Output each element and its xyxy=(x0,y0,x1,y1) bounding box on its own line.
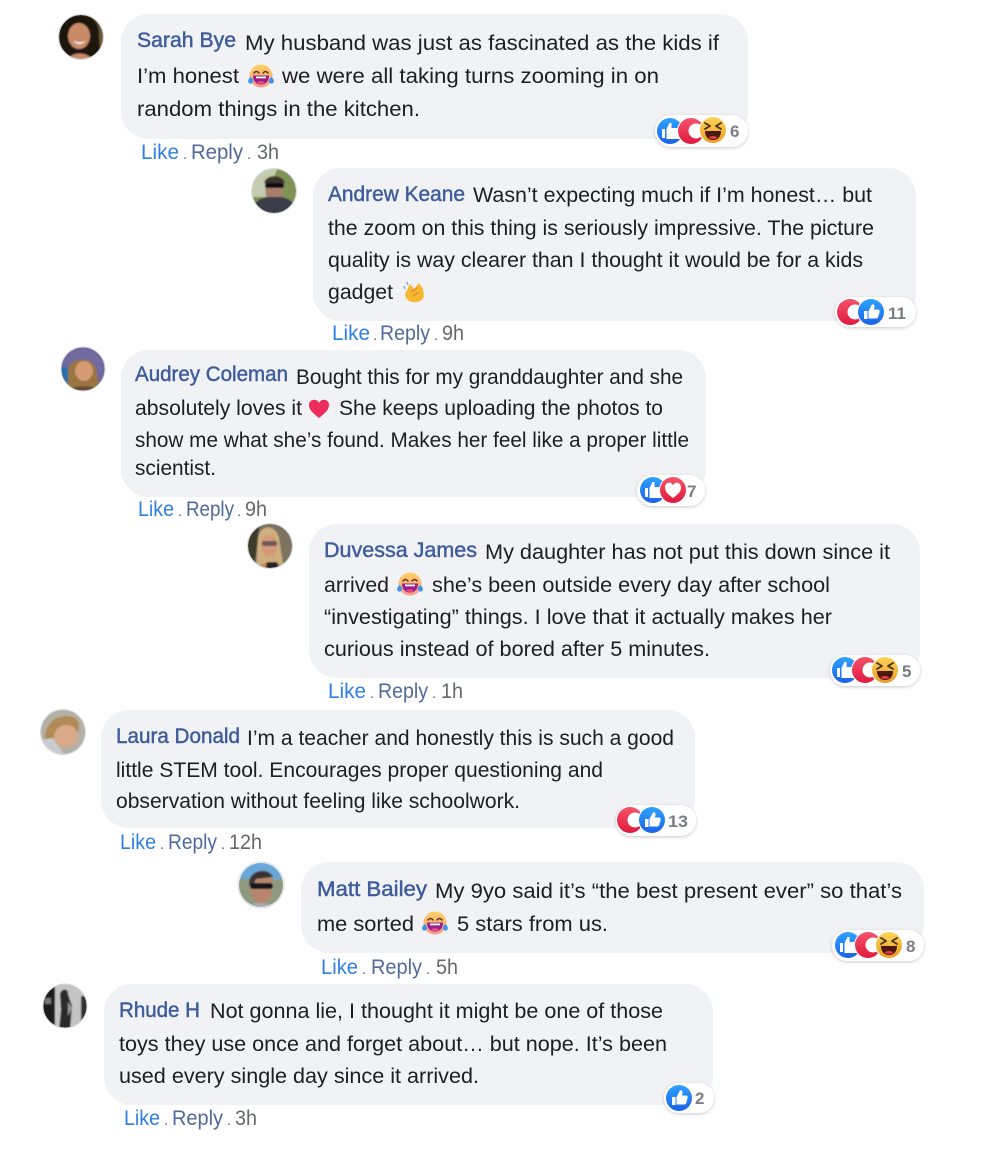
comment text: little STEM tool. Encourages proper questioning and xyxy=(116,758,603,782)
comment actions: . xyxy=(362,961,366,978)
comment text: the zoom on this thing is seriously impressive. The picture xyxy=(328,216,874,240)
reactions pill: 11 xyxy=(888,304,906,323)
comment text: curious instead of bored after 5 minutes. xyxy=(324,637,710,661)
comment actions: . xyxy=(178,503,182,520)
speech bubble xyxy=(313,168,916,321)
comment text xyxy=(328,183,874,304)
reactions pill: 2 xyxy=(695,1089,704,1108)
comment actions xyxy=(328,680,463,703)
reactions pill xyxy=(616,805,696,836)
comment actions: 9h xyxy=(245,498,267,521)
name: Sarah Bye xyxy=(137,29,236,52)
comment actions: Like xyxy=(141,141,179,164)
avatar: Laura Donald xyxy=(39,708,87,756)
comment actions xyxy=(332,322,464,345)
comment actions: . xyxy=(164,1112,168,1129)
comment actions: . xyxy=(227,1112,231,1129)
icon: laughing crying emoji xyxy=(422,912,448,934)
speech bubble xyxy=(309,524,920,678)
comment: Rhude H xyxy=(41,982,714,1130)
comment: Matt Bailey xyxy=(237,861,924,979)
icon: clapping hands emoji xyxy=(404,282,424,302)
comment actions: 3h xyxy=(235,1107,257,1130)
comment actions: 9h xyxy=(442,322,464,345)
comment actions: . xyxy=(160,836,164,853)
reactions pill: 8 xyxy=(906,937,915,956)
comment actions: Reply xyxy=(186,498,234,521)
comment actions: 12h xyxy=(229,831,262,854)
reactions pill xyxy=(655,115,748,147)
comment actions: Reply xyxy=(172,1107,223,1130)
comment: Andrew Keane xyxy=(250,167,916,345)
comment text: Bought this for my granddaughter and she xyxy=(296,365,683,389)
comment actions: Like xyxy=(120,831,156,854)
avatar: Andrew Keane xyxy=(250,167,298,215)
reactions pill: 7 xyxy=(687,482,696,501)
comment actions xyxy=(120,831,262,854)
reactions pill: 5 xyxy=(902,662,911,681)
name: Duvessa James xyxy=(324,539,477,562)
comment actions: 3h xyxy=(257,141,279,164)
comment actions: Like xyxy=(332,322,370,345)
comment text: absolutely loves it xyxy=(135,396,302,420)
comment text xyxy=(119,999,667,1088)
avatar: Audrey Coleman xyxy=(60,346,106,392)
comment actions: Reply xyxy=(380,322,430,345)
comment actions: . xyxy=(237,503,241,520)
speech bubble xyxy=(301,862,924,953)
speech bubble xyxy=(104,984,713,1105)
name: Audrey Coleman xyxy=(135,363,288,386)
comment text: gadget xyxy=(328,280,393,304)
comment actions: Reply xyxy=(191,141,243,164)
comment: Audrey Coleman xyxy=(59,345,706,521)
avatar: Duvessa James xyxy=(246,522,294,570)
comment actions xyxy=(141,141,279,164)
comment text: My 9yo said it’s “the best present ever” so that’s xyxy=(435,879,902,903)
comment actions: Like xyxy=(328,680,366,703)
reactions pill: 6 xyxy=(730,122,739,141)
comment text: show me what she’s found. Makes her feel like a proper little xyxy=(135,428,689,452)
comment actions: . xyxy=(247,146,251,163)
reactions pill xyxy=(835,297,916,327)
comment actions: . xyxy=(221,836,225,853)
comment actions xyxy=(138,498,267,521)
avatar: Matt Bailey xyxy=(237,861,285,909)
comment text xyxy=(135,365,689,480)
name: Matt Bailey xyxy=(317,878,428,901)
icon: laughing crying emoji xyxy=(248,64,274,88)
comment text: My husband was just as fascinated as the kids if xyxy=(245,31,719,55)
icon: laughing crying emoji xyxy=(397,572,423,596)
icon: heart emoji xyxy=(309,400,329,418)
comment text: I’m a teacher and honestly this is such a good xyxy=(247,726,674,750)
comment text: we were all taking turns zooming in on xyxy=(281,64,659,88)
comment text: “investigating” things. I love that it actually makes her xyxy=(324,605,832,629)
name: Rhude H xyxy=(119,999,200,1022)
comment text: My daughter has not put this down since it xyxy=(485,540,890,564)
comment: Laura Donald xyxy=(39,708,696,854)
comment text: scientist. xyxy=(135,456,216,480)
comment text: she’s been outside every day after school xyxy=(432,573,830,597)
comment actions: Like xyxy=(138,498,174,521)
avatar: Rhude H xyxy=(42,984,88,1028)
comment text: toys they use once and forget about… but nope. It’s been xyxy=(119,1032,667,1056)
comment text: used every single day since it arrived. xyxy=(119,1064,479,1088)
comment: Sarah Bye xyxy=(57,13,748,164)
reactions pill xyxy=(830,655,920,686)
comment actions: . xyxy=(183,146,187,163)
comment actions xyxy=(321,956,458,979)
comment text: Not gonna lie, I thought it might be one of those xyxy=(210,999,663,1023)
comment text xyxy=(324,540,890,661)
comment actions: . xyxy=(373,327,377,344)
name: Andrew Keane xyxy=(328,183,465,206)
speech bubble xyxy=(121,350,706,497)
comment actions: Like xyxy=(321,956,358,979)
name: Laura Donald xyxy=(116,725,240,748)
comment actions: Reply xyxy=(168,831,217,854)
reactions pill xyxy=(637,475,705,506)
comment actions: . xyxy=(370,685,374,702)
comment text: Wasn’t expecting much if I’m honest… but xyxy=(473,183,872,207)
speech bubble xyxy=(101,710,695,828)
comment actions: 1h xyxy=(441,680,463,703)
comment text: me sorted xyxy=(317,912,414,936)
comment actions: 5h xyxy=(436,956,458,979)
comment actions: Reply xyxy=(378,680,428,703)
reactions pill xyxy=(664,1083,714,1113)
comment text: arrived xyxy=(324,573,389,597)
comment text: observation without feeling like schoolwork. xyxy=(116,789,520,813)
comment text: I’m honest xyxy=(137,64,239,88)
comment text xyxy=(137,31,719,121)
comment actions: Like xyxy=(124,1107,160,1130)
comment actions: Reply xyxy=(371,956,422,979)
comment text: quality is way clearer than I thought it would be for a kids xyxy=(328,248,863,272)
comment actions: . xyxy=(426,961,430,978)
comment text xyxy=(116,726,674,813)
speech bubble xyxy=(121,14,748,139)
comment actions xyxy=(124,1107,257,1130)
reactions pill: 13 xyxy=(668,812,688,831)
comment text: 5 stars from us. xyxy=(457,912,608,936)
comment text: random things in the kitchen. xyxy=(137,97,420,121)
comment text xyxy=(317,879,902,936)
comment actions: . xyxy=(434,327,438,344)
reactions pill xyxy=(832,930,924,961)
comment text: She keeps uploading the photos to xyxy=(339,396,663,420)
comment: Duvessa James xyxy=(246,522,920,703)
avatar: Sarah Bye xyxy=(57,13,105,61)
comment actions: . xyxy=(432,685,436,702)
